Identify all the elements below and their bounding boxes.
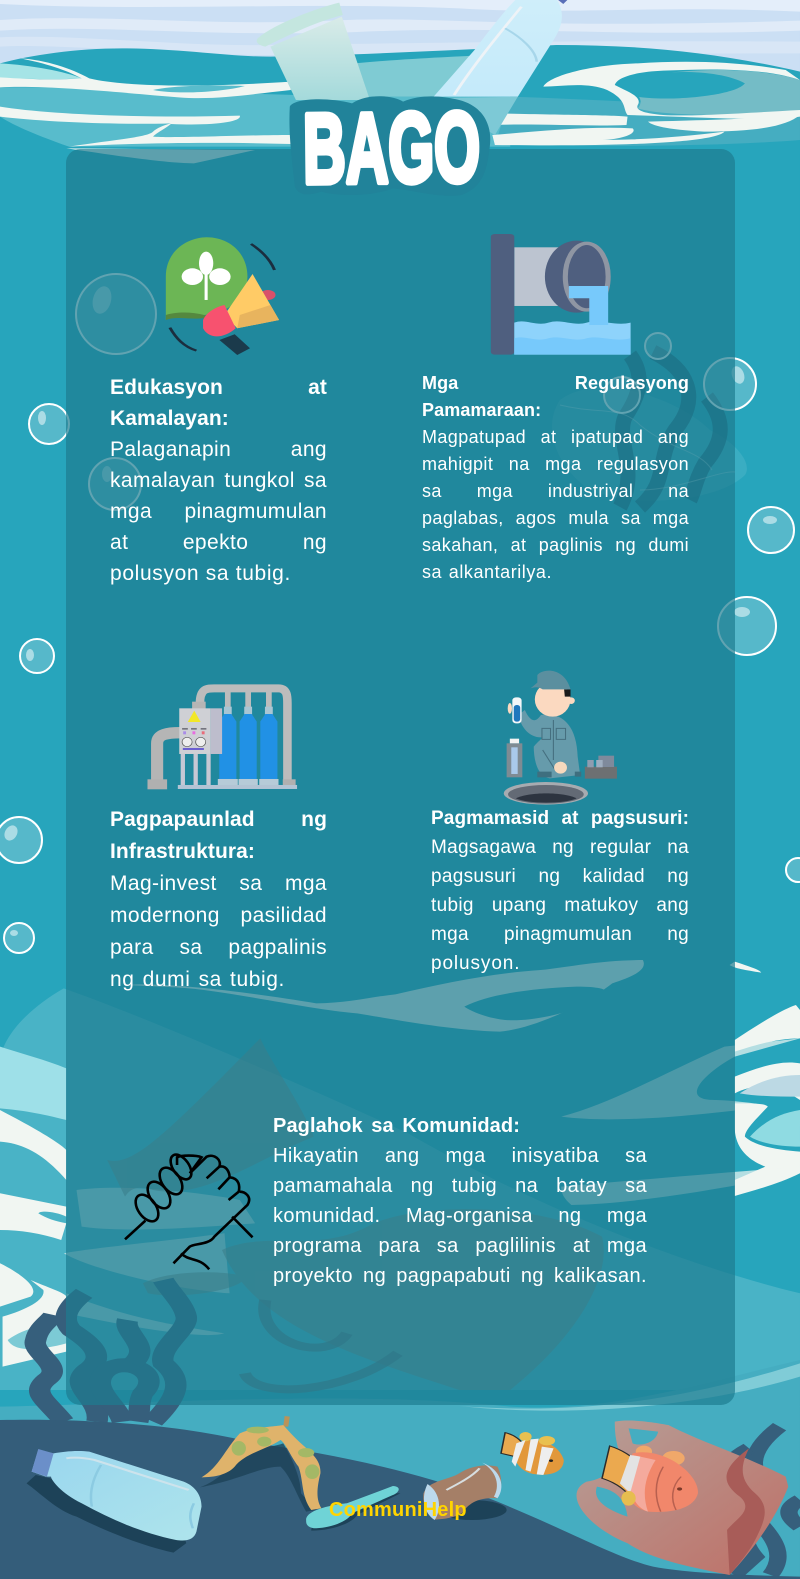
text: Paglahok sa Komunidad: Hikayatin ang mga inisyatiba sa: [273, 1145, 647, 1167]
sky and water surface: [0, 0, 800, 400]
title: BAGO: [289, 91, 490, 204]
text: Mga Regulasyong Pamamaraan: paglabas, agos mula sa mga: [422, 508, 689, 528]
text: Mga Regulasyong Pamamaraan: sakahan, at paglinis ng dumi: [422, 535, 689, 555]
text: Pagmamasid at pagsusuri: pagsusuri ng kalidad ng: [431, 866, 689, 887]
text: Pagmamasid at pagsusuri: polusyon.: [431, 953, 520, 974]
text: Edukasyon at Kamalayan: Kamalayan:: [110, 407, 229, 430]
text: Pagpapaunlad ng Infrastruktura: ng dumi sa tubig.: [110, 968, 285, 991]
text: Pagmamasid at pagsusuri: Magsagawa ng regular na: [431, 837, 689, 858]
text: Pagpapaunlad ng Infrastruktura: Infrastruktura:: [110, 840, 255, 863]
text: Edukasyon at Kamalayan: kamalayan tungkol sa: [110, 469, 327, 492]
text: Pagpapaunlad ng Infrastruktura: modernong pasilidad: [110, 904, 327, 927]
text: Edukasyon at Kamalayan: Edukasyon at: [110, 376, 327, 399]
water band and sea floor: [0, 1280, 800, 1579]
icon: discharge pipe: [491, 234, 631, 355]
spoon: [306, 1486, 401, 1531]
icon: clasped hands: [125, 1151, 253, 1269]
text: Mga Regulasyong Pamamaraan: Pamamaraan:: [422, 400, 541, 420]
text: Mga Regulasyong Pamamaraan: mahigpit na mga regulasyon: [422, 454, 689, 474]
lower foam and submerged trash: [0, 960, 800, 1390]
right seaweed: [727, 1427, 800, 1575]
text: Edukasyon at Kamalayan: [110, 376, 327, 585]
bottle floating in the water: [434, 0, 567, 135]
icon: megaphone with leaf speech bubble: [166, 237, 279, 355]
text: Mga Regulasyong Pamamaraan: Magpatupad at ipatupad ang: [422, 427, 689, 447]
left seaweed: [35, 1280, 186, 1422]
plastic bottle on sea floor: [27, 1449, 202, 1553]
icon: filtration system: [147, 688, 297, 789]
text: Paglahok sa Komunidad: Paglahok sa Komunidad:: [273, 1115, 520, 1137]
text: Pagmamasid at pagsusuri: tubig upang matukoy ang: [431, 895, 689, 916]
bubbles: [0, 274, 800, 953]
banana peel: [200, 1416, 321, 1512]
crushed can: [423, 1463, 507, 1520]
text: Pagmamasid at pagsusuri: Pagmamasid at pagsusuri:: [431, 808, 689, 829]
text: Pagpapaunlad ng Infrastruktura: [110, 808, 327, 991]
text: Pagpapaunlad ng Infrastruktura: para sa pagpalinis: [110, 936, 327, 959]
text: Mga Regulasyong Pamamaraan: Mga Regulasyong: [422, 373, 689, 393]
sea floor: [0, 1420, 800, 1579]
text: Paglahok sa Komunidad: pamamahala ng tubig na batay sa: [273, 1175, 647, 1197]
footer: CommuniHelp: CommuniHelp: [329, 1499, 467, 1521]
text: Pagpapaunlad ng Infrastruktura: Pagpapaunlad ng: [110, 808, 327, 831]
text: Mga Regulasyong Pamamaraan: sa alkantarilya.: [422, 562, 552, 582]
text: Pagmamasid at pagsusuri: [431, 808, 689, 974]
text: Paglahok sa Komunidad: komunidad. Mag-organisa ng mga: [273, 1205, 647, 1227]
bottom trash and fish: [27, 1416, 788, 1575]
text: Edukasyon at Kamalayan: at epekto ng: [110, 531, 327, 554]
title: BAGO: BAGO: [302, 91, 481, 204]
faint fish and seaweed behind the panel: [552, 352, 747, 507]
text: Pagpapaunlad ng Infrastruktura: Mag-invest sa mga: [110, 872, 327, 895]
text: Mga Regulasyong Pamamaraan: sa mga industriyal na: [422, 481, 689, 501]
small clownfish: [501, 1432, 564, 1475]
plastic bag with fish: [577, 1421, 788, 1575]
submerged plastic bag shapes: [107, 1038, 604, 1390]
main translucent panel: [66, 149, 735, 1405]
cup floating in the water: [257, 3, 370, 100]
text: Paglahok sa Komunidad: [273, 1115, 647, 1287]
text: Paglahok sa Komunidad: programa para sa paglilinis at mga: [273, 1235, 647, 1257]
text: Edukasyon at Kamalayan: polusyon sa tubig.: [110, 562, 291, 585]
text: Mga Regulasyong Pamamaraan: [422, 373, 689, 582]
text: Pagmamasid at pagsusuri: mga pinagmumulan ng: [431, 924, 689, 945]
text: Edukasyon at Kamalayan: Palaganapin ang: [110, 438, 327, 461]
text: Paglahok sa Komunidad: proyekto ng pagpapabuti ng kalikasan.: [273, 1265, 647, 1287]
text: Edukasyon at Kamalayan: mga pinagmumulan: [110, 500, 327, 523]
icon: water inspector at manhole: [504, 671, 617, 805]
